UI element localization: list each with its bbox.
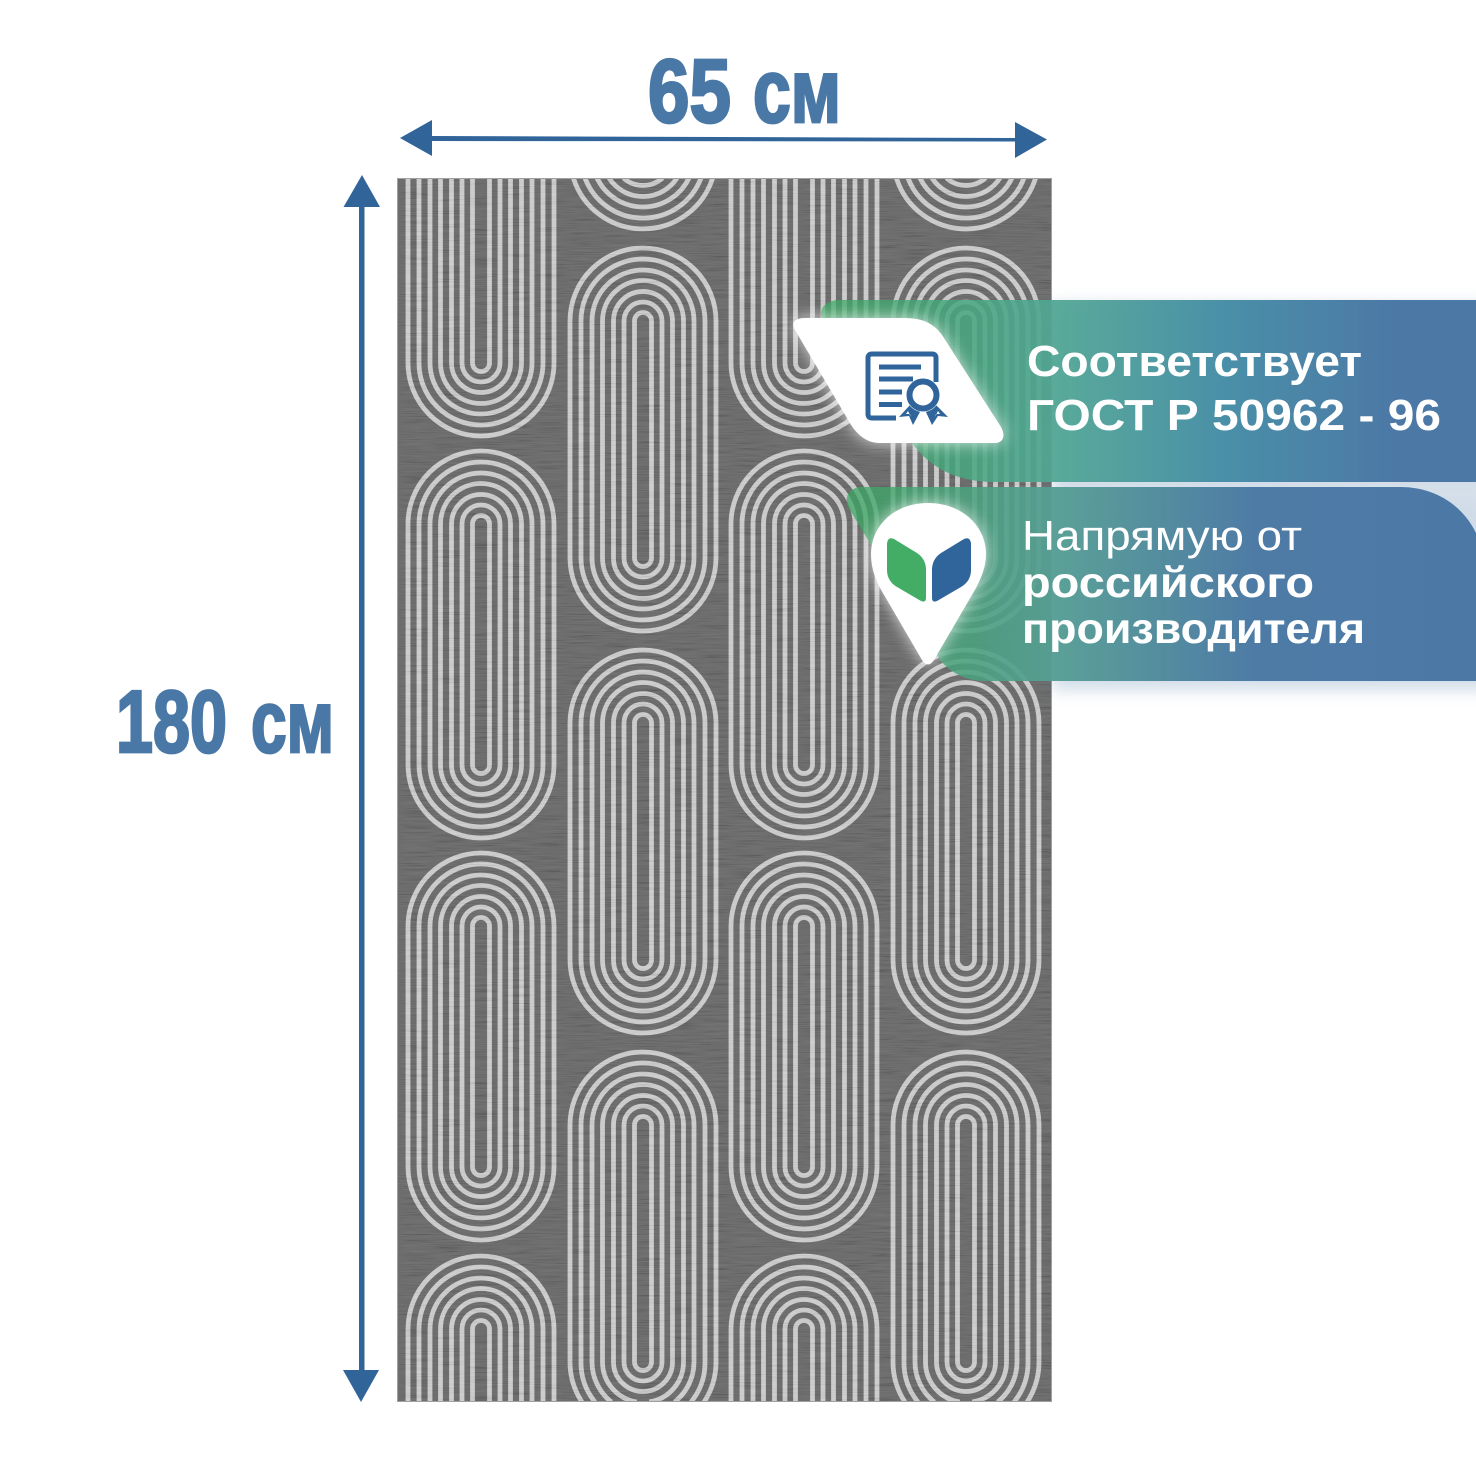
banner: GOST compliance	[793, 300, 1476, 482]
width label	[648, 42, 841, 142]
text: compliance	[1027, 337, 1441, 440]
icon: location pin	[871, 503, 986, 664]
badge: white parallelogram	[793, 318, 1003, 443]
column 2 arches	[570, 178, 716, 1402]
height label	[116, 672, 334, 771]
panel: wallpaper pattern	[397, 49, 1052, 1402]
width label: 65	[648, 42, 731, 142]
column 4 arches	[893, 178, 1039, 1402]
banner: direct from manufacturer	[847, 487, 1476, 681]
text: manufacturer	[1022, 512, 1365, 653]
text: manufacturer: российского	[1022, 559, 1314, 607]
banner shadows	[1052, 304, 1476, 690]
width label: см	[753, 42, 841, 142]
text: manufacturer: Напрямую от	[1022, 512, 1302, 559]
height arrow	[343, 175, 380, 1402]
icon: green leaf	[887, 538, 926, 602]
pin glow	[871, 503, 986, 664]
text: compliance: ГОСТ Р 50962 - 96	[1027, 391, 1441, 440]
text: manufacturer: производителя	[1022, 605, 1365, 653]
width arrow	[400, 120, 1047, 158]
icon: certificate	[868, 354, 948, 425]
badge glow	[793, 318, 1003, 443]
icon: blue leaf	[932, 538, 971, 602]
height label: 180	[116, 672, 227, 771]
column 1 arches	[408, 49, 554, 1402]
text: compliance: Соответствует	[1027, 337, 1362, 386]
height label: см	[251, 672, 334, 771]
column 3 arches	[731, 49, 877, 1402]
